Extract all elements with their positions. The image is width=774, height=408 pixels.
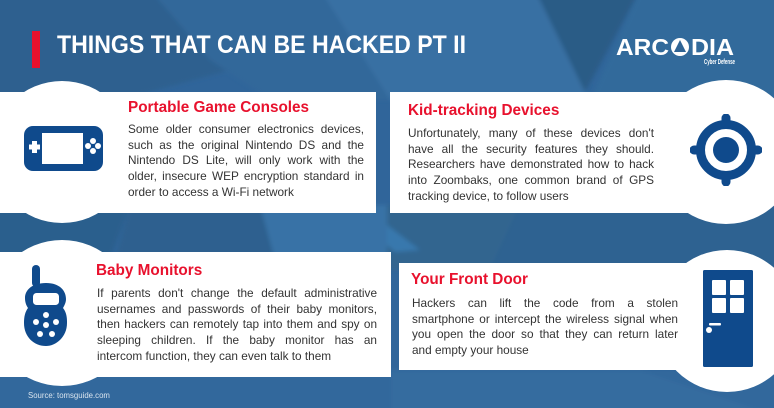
text block: smartphone or intercept the wireless signal when <box>412 312 678 326</box>
panel: baby monitors <box>0 240 391 386</box>
text block <box>408 126 654 203</box>
icon: game console <box>24 126 103 171</box>
heading: Baby Monitors <box>96 262 202 279</box>
text block <box>412 296 678 357</box>
text block: Nintendo DS Lite, will only work with the <box>128 153 364 167</box>
heading: Portable Game Consoles <box>128 99 309 116</box>
text block: usernames and passwords of their baby monitors, <box>97 302 377 316</box>
logo: Arcadia Cyber Defense: DIA <box>691 34 734 60</box>
text block: sleeping children. If the baby monitor has an <box>97 333 377 347</box>
panel: kid-tracking devices <box>390 80 774 224</box>
icon: baby monitor <box>24 265 67 346</box>
title: THINGS THAT CAN BE HACKED PT II <box>57 31 466 59</box>
text block <box>128 122 364 199</box>
panel: your front door <box>399 250 774 392</box>
panel shape <box>0 240 391 386</box>
text block: tracking device, to follow users <box>408 189 569 203</box>
text block: Hackers can lift the code from a stolen <box>412 296 678 310</box>
text block: such as the original Nintendo DS and the <box>128 138 364 152</box>
heading: Your Front Door <box>411 271 528 288</box>
text block: order to access a Wi-Fi network <box>128 185 294 199</box>
text block: Researchers have demonstrated how to hack <box>408 157 654 171</box>
text block: Unfortunately, many of these devices don't <box>408 126 654 140</box>
text block: into Zoombaks, one common brand of GPS <box>408 173 654 187</box>
text block: older, insecure WEP encryption standard in <box>128 169 364 183</box>
text block: then hackers can remotely tap into them and spy on <box>97 317 377 331</box>
source note: Source: tomsguide.com <box>28 391 110 400</box>
panel shape <box>0 81 376 223</box>
text block: Some older consumer electronics devices, <box>128 122 364 136</box>
red accent bar <box>32 31 40 68</box>
panel shape <box>390 80 774 224</box>
logo: Arcadia Cyber Defense: ARC <box>616 34 669 60</box>
text block: you open the door so that they can return later <box>412 327 678 341</box>
text block: and empty your house <box>412 343 529 357</box>
text block: intercom function, they can even talk to them <box>97 349 331 363</box>
logo: Arcadia Cyber Defense <box>616 34 735 66</box>
panel: portable game consoles <box>0 81 376 223</box>
text block: have all the security features they should. <box>408 142 654 156</box>
icon: location target <box>690 114 762 186</box>
text block: If parents don't change the default administrative <box>97 286 377 300</box>
logo: Arcadia Cyber Defense: Cyber Defense <box>704 59 735 66</box>
heading: Kid-tracking Devices <box>408 102 559 119</box>
icon: door <box>703 270 753 367</box>
text block <box>97 286 377 363</box>
panel shape <box>399 250 774 392</box>
